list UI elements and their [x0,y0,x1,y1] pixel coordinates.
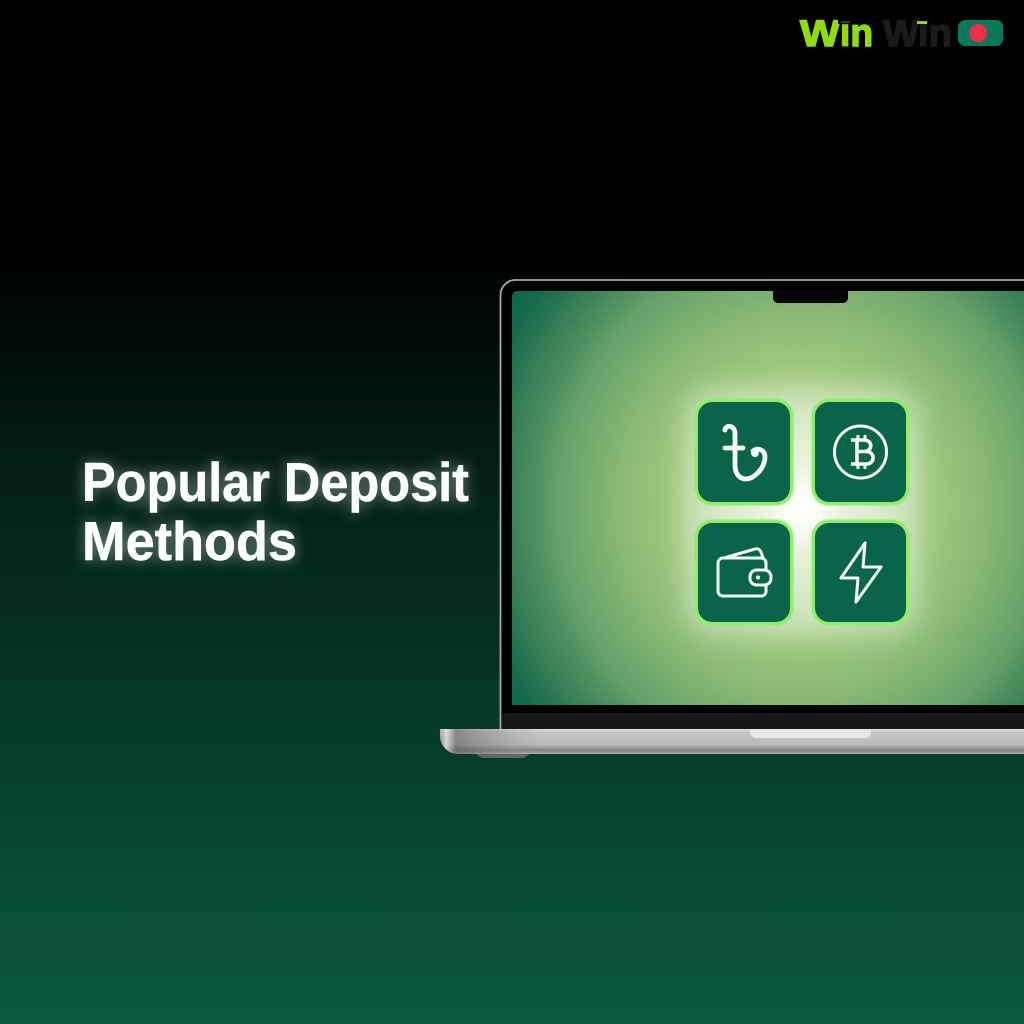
title: Popular Deposit [82,451,469,513]
logo word: Win lime [800,12,873,55]
logo: WinWin with Bangladesh flag [800,12,1003,55]
center hot spot [778,488,826,536]
logo word: Win dark: W [883,13,919,54]
camera notch [773,290,848,303]
base edge shading [440,729,540,754]
title: Popular Deposit [82,451,469,513]
laptop foot [476,754,530,758]
icon: wallet [718,549,771,596]
icon: lightning bolt [841,543,881,602]
title [82,451,469,572]
laptop base [440,729,1024,754]
icon tiles glow [686,390,918,634]
title: Methods [82,510,297,572]
tile: bitcoin [812,398,910,506]
tile: lightning [812,520,910,626]
icon: taka symbol [725,426,765,479]
screen [512,291,1024,705]
laptop lid [500,280,1024,735]
trackpad notch [750,729,871,738]
title: Methods [82,510,297,572]
logo word: Win dark [883,12,952,55]
logo word: Win lime: in [840,12,873,55]
tile: taka [694,398,794,506]
laptop chin [502,713,1024,729]
logo word: Win lime: W [800,13,840,54]
logo word: Win dark: in [918,12,952,55]
laptop [440,280,1024,758]
tile: wallet [694,520,794,626]
icon: bitcoin [834,426,886,478]
